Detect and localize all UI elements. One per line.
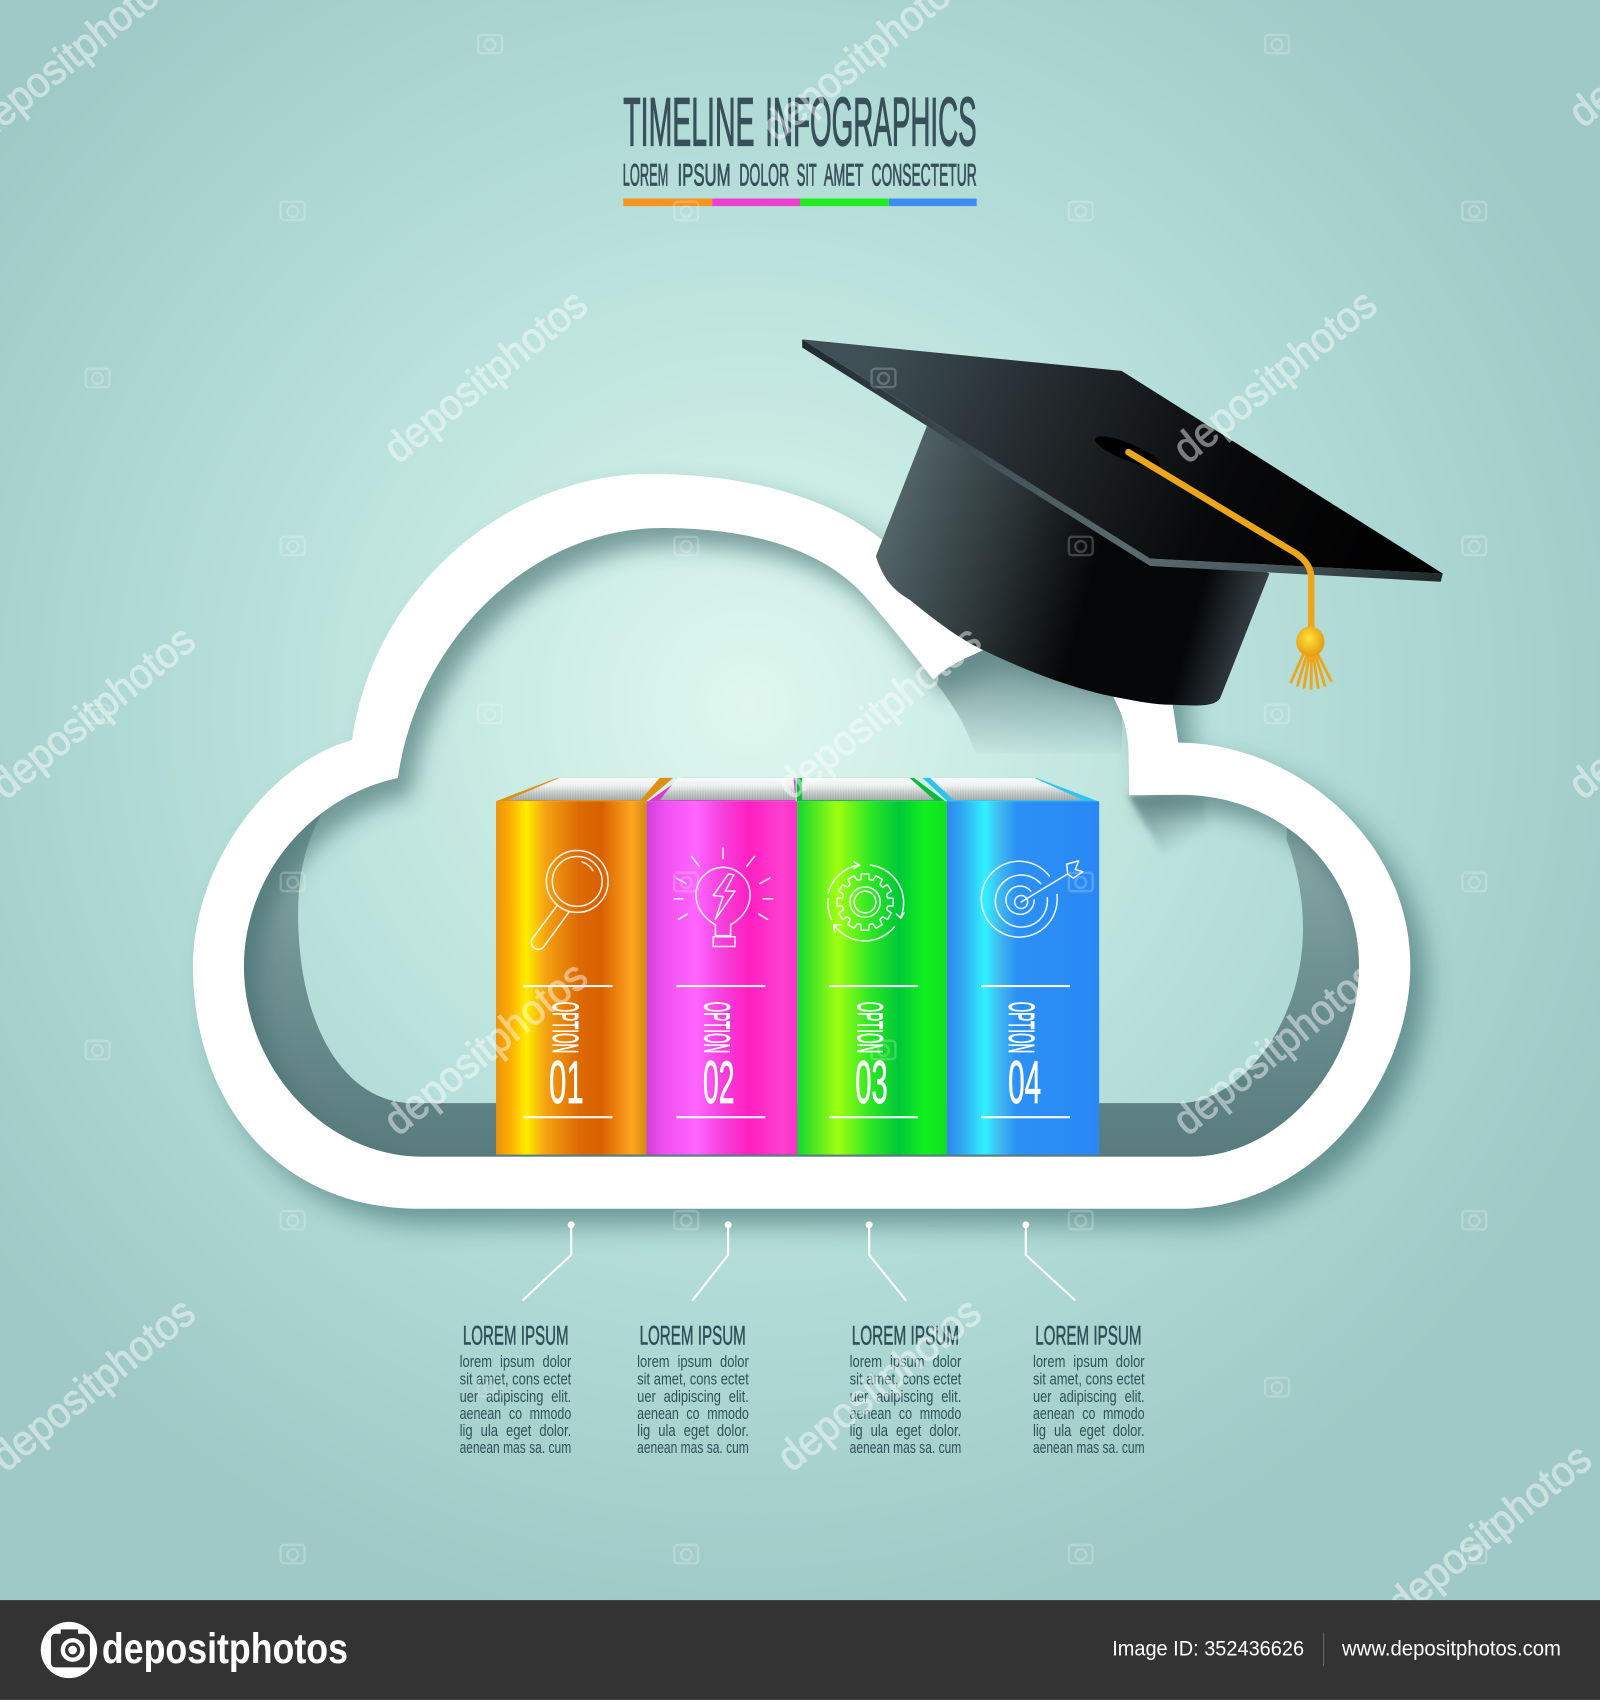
text: INFOGRAPHICS	[765, 84, 977, 160]
footer bar	[0, 1600, 1600, 1700]
text block 3: sit amet, cons ectet	[850, 1370, 962, 1388]
icon: target with arrow	[981, 861, 1083, 937]
text block 3	[850, 1319, 962, 1457]
text block 4: lorem ipsum dolor	[1033, 1353, 1145, 1371]
text block 1: lorem ipsum dolor	[460, 1353, 572, 1371]
watermark text: depositphotos	[374, 952, 596, 1144]
text block 2	[637, 1319, 749, 1457]
connector 1	[522, 1221, 575, 1301]
book 4	[922, 778, 1099, 1155]
watermark text: depositphotos	[1164, 280, 1385, 472]
connector 3	[866, 1221, 906, 1301]
connector 4	[1022, 1221, 1075, 1301]
text block 4: lig ula eget dolor.	[1033, 1422, 1145, 1440]
book 4: 04	[1008, 1048, 1041, 1116]
image id: Image ID: 352436626	[1112, 1637, 1304, 1660]
text block 3: lig ula eget dolor.	[850, 1422, 961, 1440]
subtitle: IPSUM	[678, 158, 731, 193]
cloud outline	[193, 474, 1410, 1209]
text block 1: aenean mas sa. cum	[460, 1439, 571, 1457]
text block 4: aenean co mmodo	[1033, 1405, 1145, 1423]
label: option 04: OPTION	[1001, 1002, 1041, 1053]
text block 1: lig ula eget dolor.	[460, 1422, 571, 1440]
label: option 02: OPTION	[697, 1002, 737, 1053]
text block 1: sit amet, cons ectet	[460, 1370, 572, 1388]
watermark text: depositphotos	[374, 280, 596, 472]
text block 3: aenean mas sa. cum	[850, 1439, 961, 1457]
icon: camera logo	[41, 1622, 97, 1678]
watermark camera marks	[86, 35, 1486, 1563]
title: TIMELINE	[623, 84, 754, 160]
title block	[623, 84, 977, 206]
icon: graduation cap	[802, 339, 1443, 705]
book 3	[797, 778, 947, 1155]
text block 4	[1033, 1319, 1145, 1457]
text block 1: LOREM IPSUM	[463, 1319, 569, 1350]
text block 1: aenean co mmodo	[460, 1405, 571, 1423]
book 2	[647, 778, 797, 1155]
icon: magnifier	[531, 851, 608, 949]
book 1	[496, 778, 673, 1155]
text block 1: uer adipiscing elit.	[460, 1388, 571, 1406]
text block 2: aenean co mmodo	[637, 1405, 749, 1423]
text block 2: aenean mas sa. cum	[637, 1439, 749, 1457]
text block 3: LOREM IPSUM	[852, 1319, 959, 1350]
subtitle: SIT	[797, 158, 817, 193]
text block 3: uer adipiscing elit.	[850, 1388, 961, 1406]
book 2: 02	[703, 1048, 734, 1116]
text block 3: aenean co mmodo	[850, 1405, 961, 1423]
icon: light bulb	[674, 848, 773, 946]
website: www.depositphotos.com	[1341, 1637, 1561, 1660]
text block 1	[460, 1319, 572, 1457]
subtitle: DOLOR	[739, 158, 789, 193]
text: CONSECTETUR	[872, 158, 977, 193]
label: option 01: OPTION	[545, 1002, 585, 1053]
four colour rule	[623, 199, 977, 206]
text block 2: sit amet, cons ectet	[637, 1370, 749, 1388]
text block 2: lorem ipsum dolor	[637, 1353, 749, 1371]
cloud hole background	[244, 528, 1359, 1157]
subtitle: LOREM	[623, 158, 668, 193]
watermark text: depositphotos	[1164, 952, 1385, 1144]
text block 2: uer adipiscing elit.	[637, 1388, 749, 1406]
watermark text: depositphotos	[768, 616, 990, 808]
label: option 03: 03	[855, 1048, 888, 1116]
text block 4: uer adipiscing elit.	[1033, 1388, 1145, 1406]
label: option 01: 01	[549, 1048, 584, 1116]
icon: gear with arrows	[828, 862, 904, 941]
subtitle: AMET	[824, 158, 863, 193]
text block 4: LOREM IPSUM	[1035, 1319, 1141, 1350]
footer logo text: depositphotos	[102, 1625, 348, 1672]
text block 4: sit amet, cons ectet	[1033, 1370, 1145, 1388]
cloud drop shadow	[209, 490, 1427, 1225]
connector 2	[692, 1221, 732, 1301]
cloud inner shadow	[244, 528, 1359, 1157]
text block 3: lorem ipsum dolor	[850, 1353, 962, 1371]
text block 4: aenean mas sa. cum	[1033, 1439, 1145, 1457]
label: option 03: OPTION	[849, 1002, 889, 1053]
watermark text: depositphotos	[768, 1288, 990, 1480]
text block 2: LOREM IPSUM	[640, 1319, 746, 1350]
text block 2: lig ula eget dolor.	[637, 1422, 749, 1440]
subtitle	[623, 158, 977, 193]
